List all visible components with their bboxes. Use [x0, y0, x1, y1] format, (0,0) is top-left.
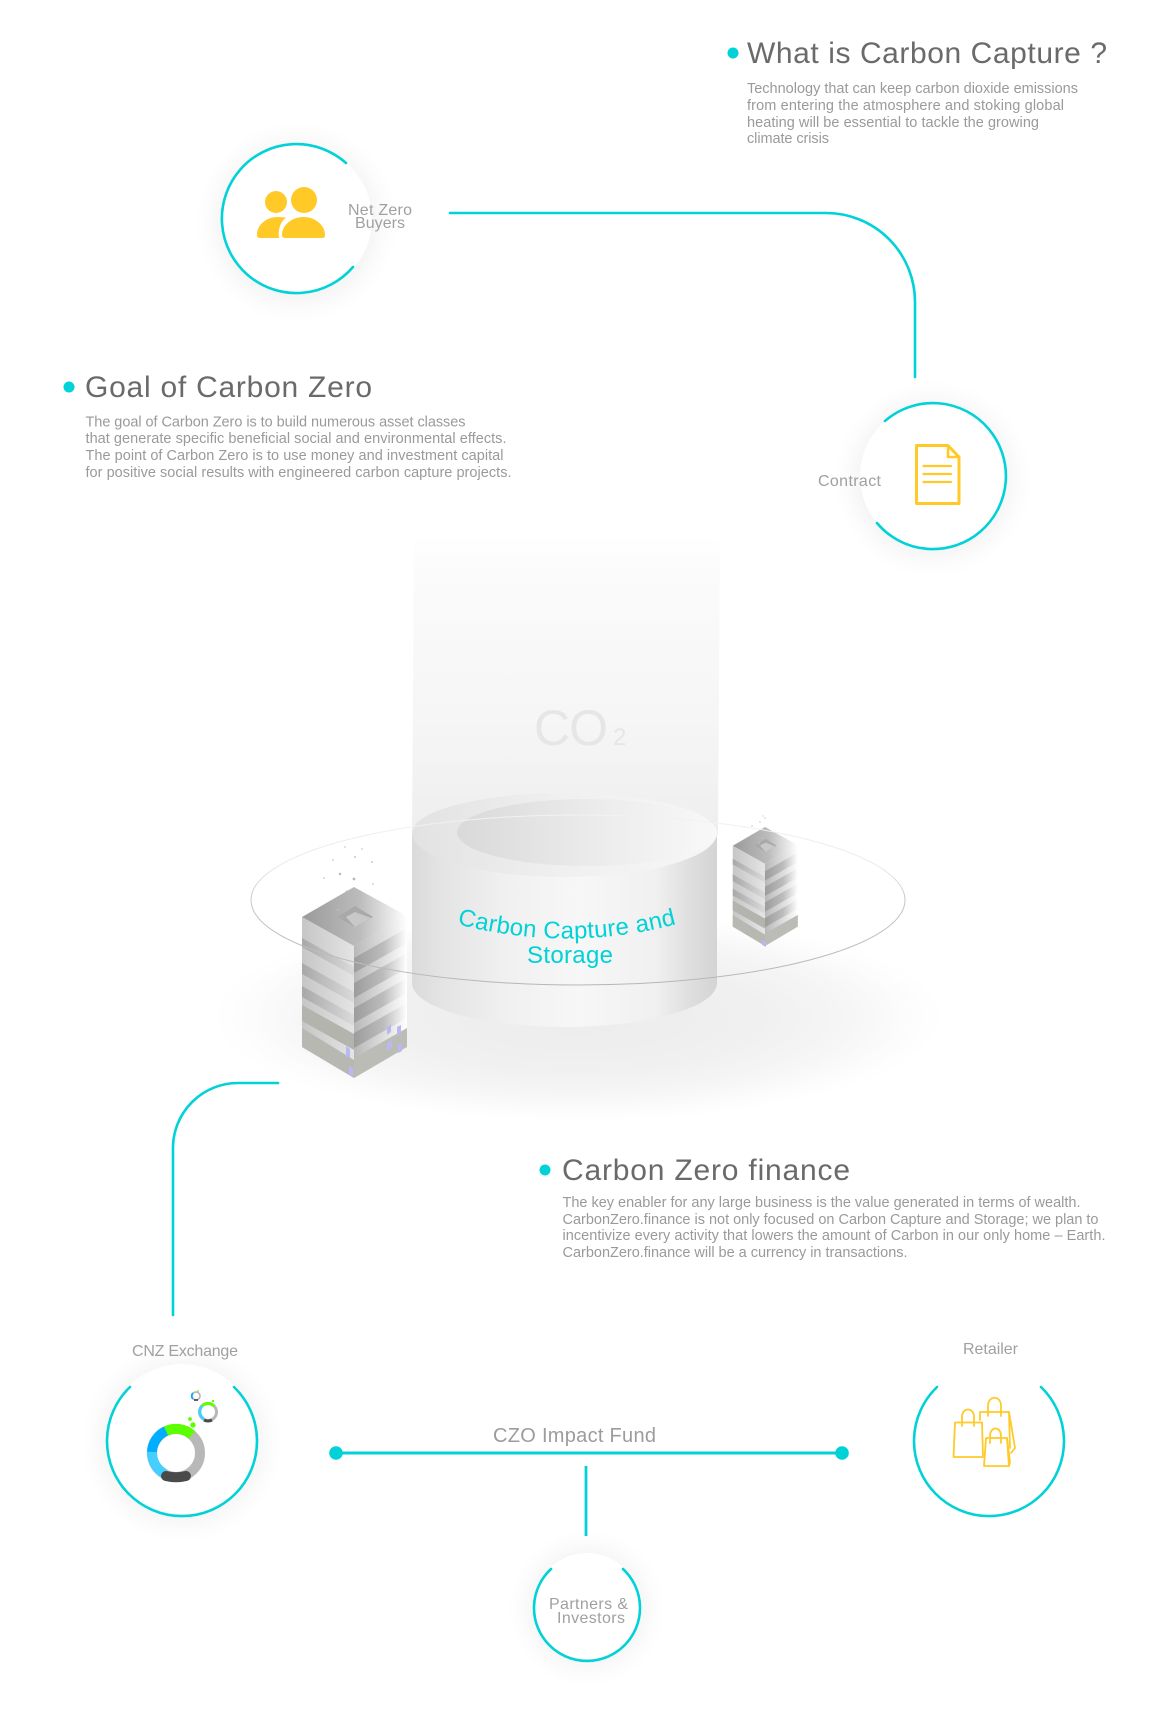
body text: [562, 1195, 1106, 1261]
label: CZO Impact Fund: [493, 1425, 656, 1447]
label: Buyers: [355, 215, 405, 232]
well: [457, 799, 717, 866]
building: right tower: [733, 815, 798, 947]
node: net zero buyers: [215, 140, 412, 304]
label: Net Zero: [348, 202, 412, 219]
connector: buyers to contract: [450, 213, 915, 377]
heading: Goal of Carbon Zero: [85, 371, 372, 404]
bullet dot: [64, 382, 74, 392]
body text: that generate specific beneficial social and environmental effects.: [86, 431, 506, 447]
label: Contract: [818, 473, 882, 490]
body text: incentivize every activity that lowers the amount of Carbon in our only home – Earth.: [562, 1228, 1106, 1244]
connector: storage to exchange: [173, 1083, 278, 1315]
bullet dot: [728, 48, 738, 58]
label: CNZ Exchange: [132, 1343, 238, 1360]
section: goal of carbon zero: [64, 371, 512, 481]
body text: climate crisis: [747, 131, 829, 147]
body text: [747, 81, 1078, 147]
node: partners and investors: [527, 1548, 647, 1668]
connector: impact fund: [329, 1425, 849, 1460]
storage cylinder: [412, 800, 717, 1027]
body text: The point of Carbon Zero is to use money and investment capital: [86, 448, 504, 464]
body text: The key enabler for any large business is the value generated in terms of wealth.: [562, 1195, 1080, 1211]
co2 beam: [412, 536, 720, 835]
connector: fund to partners: [585, 1466, 587, 1536]
icon: people: [257, 187, 325, 238]
heading: What is Carbon Capture ?: [747, 37, 1107, 70]
cylinder label: [460, 908, 675, 969]
node: contract: [818, 399, 1013, 559]
endpoint right: [835, 1446, 849, 1460]
icon: exchange rings: [152, 1390, 216, 1477]
endpoint left: [329, 1446, 343, 1460]
co2 label: CO: [534, 700, 608, 756]
label: Investors: [557, 1610, 625, 1627]
icon: document: [916, 446, 959, 504]
body text: heating will be essential to tackle the growing: [747, 115, 1039, 131]
label: [348, 202, 412, 232]
node: cnz exchange: [100, 1343, 264, 1524]
cylinder label: Carbon Capture and: [460, 908, 675, 944]
body text: Technology that can keep carbon dioxide emissions: [747, 81, 1078, 97]
body text: CarbonZero.finance will be a currency in transactions.: [562, 1245, 908, 1261]
building: left tower: [302, 846, 407, 1078]
label: Partners &: [549, 1596, 628, 1613]
section: carbon zero finance: [540, 1154, 1106, 1261]
body text: [86, 414, 512, 481]
bullet dot: [540, 1164, 550, 1176]
co2 beam: 2: [613, 724, 626, 751]
body text: from entering the atmosphere and stoking global: [747, 98, 1064, 114]
orbit ring: [251, 815, 905, 985]
body text: for positive social results with engineered carbon capture projects.: [86, 465, 512, 481]
floor shadow: [213, 912, 943, 1122]
label: [549, 1596, 628, 1627]
icon: shopping bags: [954, 1398, 1015, 1466]
heading: Carbon Zero finance: [562, 1154, 850, 1187]
body text: The goal of Carbon Zero is to build numerous asset classes: [86, 414, 466, 430]
cylinder label: Storage: [527, 942, 613, 969]
section: what is carbon capture: [728, 37, 1107, 147]
body text: CarbonZero.finance is not only focused on Carbon Capture and Storage; we plan to: [562, 1212, 1098, 1228]
node: retailer: [914, 1341, 1064, 1516]
label: Retailer: [963, 1341, 1019, 1358]
